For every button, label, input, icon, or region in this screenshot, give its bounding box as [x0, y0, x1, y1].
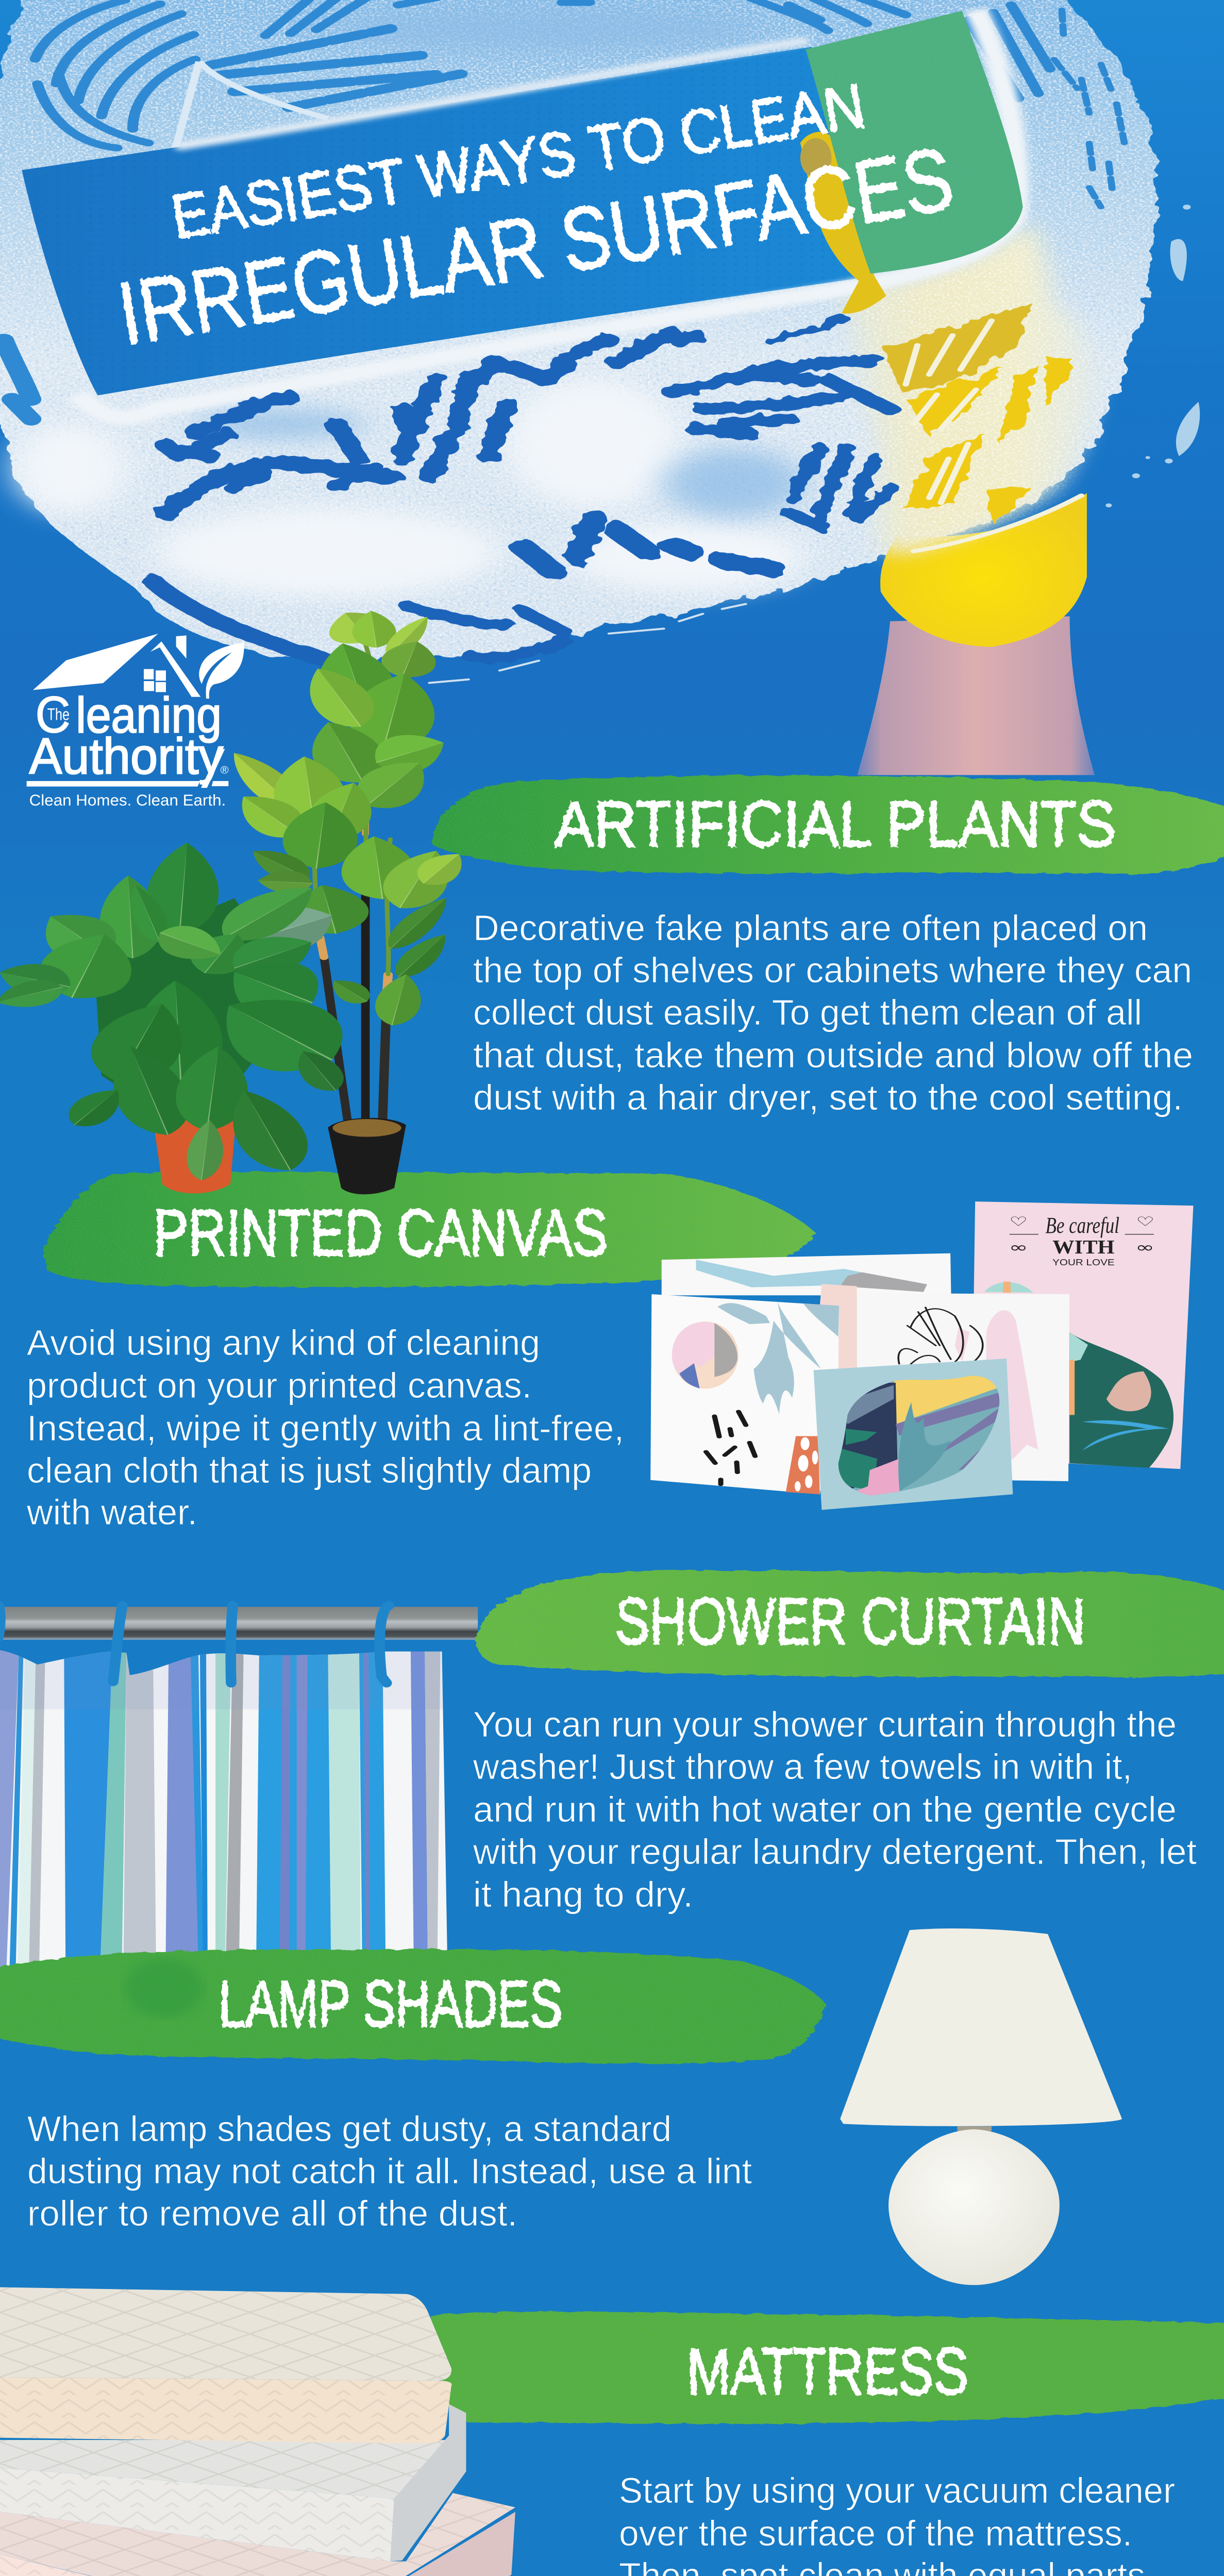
text: shower curtain: You can run your shower curtain through the — [473, 1704, 1177, 1744]
center white canvas — [857, 1293, 1069, 1481]
tall pink canvas — [971, 1201, 1193, 1469]
logo tagline: Clean Homes. Clean Earth. — [29, 791, 226, 809]
fiddle leaf fig leaves — [217, 605, 475, 1028]
text: shower curtain: it hang to dry. — [473, 1874, 693, 1914]
foam light patches — [15, 380, 804, 597]
logo wordmark: The — [47, 705, 70, 723]
text: printed canvas: clean cloth that is just slightly damp — [27, 1450, 592, 1490]
illustration: table lamp — [840, 1928, 1122, 2285]
logo wordmark — [29, 686, 229, 785]
canvas quote: YOUR LOVE — [1052, 1258, 1115, 1268]
text: artificial plants: the top of shelves or cabinets where they can — [473, 950, 1192, 990]
arm — [857, 616, 1095, 775]
glove patches showing through foam — [882, 303, 1076, 523]
cleared band — [22, 47, 875, 396]
illustration: artificial plants — [0, 605, 475, 1194]
text: printed canvas: with water. — [26, 1492, 197, 1532]
text: shower curtain: with your regular laundry detergent. Then, let — [473, 1832, 1197, 1872]
cream foam over glove — [843, 222, 1093, 555]
text: lamp shades: dusting may not catch it all. Instead, use a lint — [27, 2151, 752, 2191]
text: printed canvas: Instead, wipe it gently with a lint-free, — [27, 1408, 624, 1448]
text: lamp shades: roller to remove all of the dust. — [27, 2193, 517, 2233]
black pot — [328, 1118, 406, 1194]
hero photo: foam, sponge and gloved hand — [0, 0, 1200, 775]
heading: shower curtain: SHOWER CURTAIN — [615, 1585, 1085, 1658]
left white canvas — [650, 1294, 839, 1494]
text: mattress — [619, 2470, 1188, 2576]
canvas quote: ∞ — [1135, 1239, 1154, 1256]
curtain — [0, 1648, 450, 1973]
sponge — [806, 11, 1023, 274]
heading: mattress: MATTRESS — [687, 2335, 968, 2409]
glove cuff — [880, 493, 1087, 647]
illustration: stack of mattresses — [0, 2287, 566, 2576]
logo wordmark: C — [35, 686, 71, 744]
text: artificial plants: that dust, take them outside and blow off the — [473, 1035, 1193, 1075]
text: printed canvas: Avoid using any kind of cleaning — [27, 1323, 540, 1363]
banner: artificial plants — [432, 775, 1224, 874]
banner: lamp shades — [0, 1949, 826, 2064]
top mattress — [0, 2287, 451, 2381]
text: mattress: over the surface of the mattress. — [619, 2513, 1132, 2553]
logo: The Cleaning Authority — [27, 634, 244, 809]
logo wordmark: ® — [221, 765, 229, 776]
heading: lamp shades: LAMP SHADES — [219, 1968, 562, 2041]
swirl stripes in the upper foam — [4, 0, 1125, 419]
plant trunks — [312, 627, 391, 1123]
text: printed canvas — [26, 1323, 624, 1532]
canvas quote: ♡ — [1136, 1214, 1154, 1229]
heading: printed canvas: PRINTED CANVAS — [154, 1196, 608, 1270]
foam rim around band — [176, 40, 808, 147]
curtain rod — [0, 1607, 478, 1640]
banner: mattress — [429, 2312, 1224, 2424]
orange pot — [154, 1094, 238, 1193]
banner: shower curtain — [476, 1570, 1224, 1677]
illustration: printed canvases — [650, 1201, 1193, 1510]
top-left white vein — [176, 62, 328, 148]
yellow finger behind sponge — [800, 132, 886, 314]
back white canvas — [662, 1253, 951, 1295]
text: shower curtain: washer! Just throw a few towels in with it, — [473, 1747, 1132, 1787]
foam body — [0, 0, 1159, 662]
illustration: shower curtain and rod — [0, 1605, 478, 1973]
text: artificial plants: dust with a hair dryer, set to the cool setting. — [473, 1077, 1183, 1117]
canvas quote: ∞ — [1009, 1239, 1028, 1256]
text: lamp shades: When lamp shades get dusty, a standard — [27, 2109, 672, 2149]
logo wordmark: leaning — [76, 687, 222, 743]
banner: printed canvas — [43, 1172, 816, 1287]
canvas quote: WITH — [1052, 1236, 1115, 1258]
dark foam holes — [152, 318, 890, 660]
text: mattress: Start by using your vacuum cleaner — [619, 2470, 1175, 2511]
thin foam strands — [906, 320, 1081, 551]
curtain hooks — [0, 1605, 389, 1683]
logo roof and leaf — [33, 634, 244, 699]
text: shower curtain — [473, 1704, 1197, 1914]
logo wordmark: Authority — [29, 728, 224, 785]
text: printed canvas: product on your printed canvas. — [27, 1365, 532, 1405]
canvas quote: ♡ — [1009, 1214, 1028, 1229]
text: artificial plants: collect dust easily. To get them clean of all — [473, 992, 1142, 1032]
heading: artificial plants: ARTIFICIAL PLANTS — [555, 788, 1116, 860]
title: IRREGULAR SURFACES — [112, 129, 960, 364]
third mattress — [0, 2493, 515, 2576]
logo underline — [27, 781, 228, 787]
foam spatter on right — [1105, 205, 1200, 507]
text: artificial plants — [473, 908, 1193, 1117]
foam dots lower — [429, 604, 746, 683]
title: EASIEST WAYS TO CLEAN — [166, 70, 869, 252]
text: artificial plants: Decorative fake plants are often placed on — [473, 908, 1148, 948]
black dashes — [706, 1412, 755, 1484]
front teal canvas — [814, 1359, 1013, 1510]
canvas quote: Be careful — [1045, 1212, 1119, 1238]
canvas quote — [1009, 1212, 1154, 1268]
text: shower curtain: and run it with hot water on the gentle cycle — [473, 1789, 1177, 1829]
text: lamp shades — [27, 2109, 752, 2233]
second mattress — [0, 2440, 449, 2498]
peace lily leaves — [0, 841, 367, 1181]
